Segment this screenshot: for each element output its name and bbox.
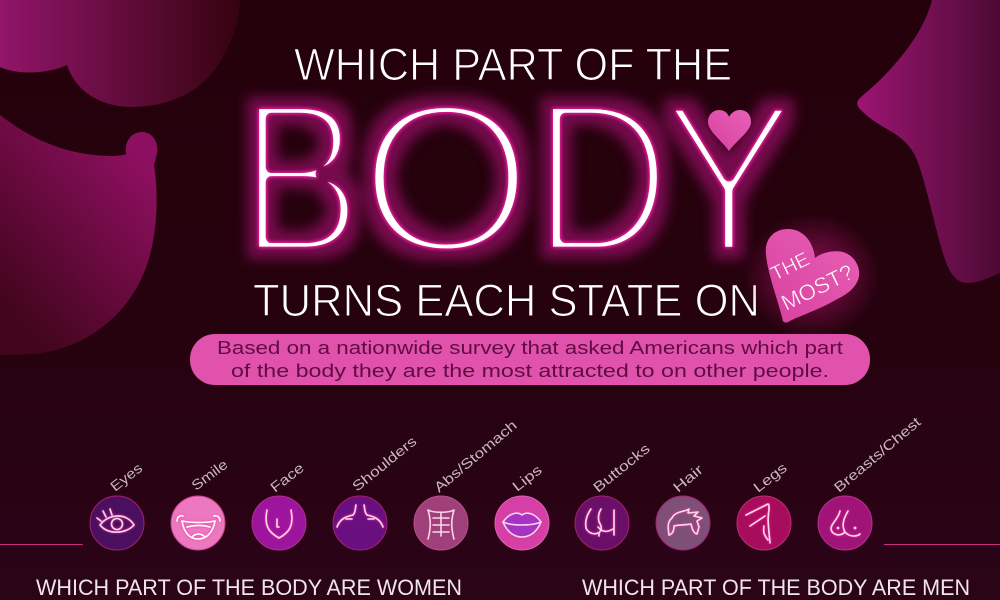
heart badge: the most: MOST? bbox=[777, 259, 857, 315]
decorative shape: breast left bbox=[0, 115, 157, 355]
icon: eyes bbox=[90, 460, 145, 550]
icon: buttocks bbox=[575, 440, 653, 550]
icon: face bbox=[252, 459, 307, 550]
icon: smile bbox=[171, 456, 231, 550]
icon: shoulders bbox=[333, 433, 420, 550]
heading: women: WHICH PART OF THE BODY ARE WOMEN bbox=[36, 575, 462, 600]
icon: heart in the Y bbox=[708, 110, 751, 151]
title: which part of the: WHICH PART OF THE bbox=[294, 39, 732, 90]
heading: men: WHICH PART OF THE BODY ARE MEN bbox=[582, 575, 970, 600]
subtitle pill: Based on a nationwide survey that asked Americans which part bbox=[217, 338, 843, 358]
label: shoulders: Shoulders bbox=[349, 433, 420, 494]
icon: hair bbox=[656, 461, 710, 550]
icon: legs bbox=[737, 459, 791, 550]
icon: abs bbox=[414, 417, 520, 550]
heart badge: the most bbox=[744, 213, 880, 337]
label: lips: Lips bbox=[509, 461, 545, 494]
label: face: Face bbox=[267, 459, 307, 495]
label: smile: Smile bbox=[188, 456, 231, 493]
heart badge: the most: THE bbox=[768, 248, 813, 285]
decorative shape: lips top left bbox=[0, 0, 240, 107]
label: eyes: Eyes bbox=[107, 460, 145, 494]
title: BODY neon letters bbox=[240, 89, 801, 268]
icon: breasts/chest bbox=[818, 414, 924, 550]
label: hair: Hair bbox=[670, 461, 706, 495]
decorative shape: breast right bbox=[857, 0, 1000, 283]
label: buttocks: Buttocks bbox=[590, 440, 653, 495]
subtitle pill: of the body they are the most attracted to on other people. bbox=[231, 361, 829, 381]
icon: lips bbox=[495, 461, 549, 550]
label: legs: Legs bbox=[750, 459, 790, 495]
title: turns each state on: TURNS EACH STATE ON bbox=[253, 275, 760, 326]
subtitle pill bbox=[190, 334, 870, 385]
label: abs/stomach: Abs/Stomach bbox=[431, 417, 520, 495]
label: breasts/chest: Breasts/Chest bbox=[831, 414, 924, 495]
